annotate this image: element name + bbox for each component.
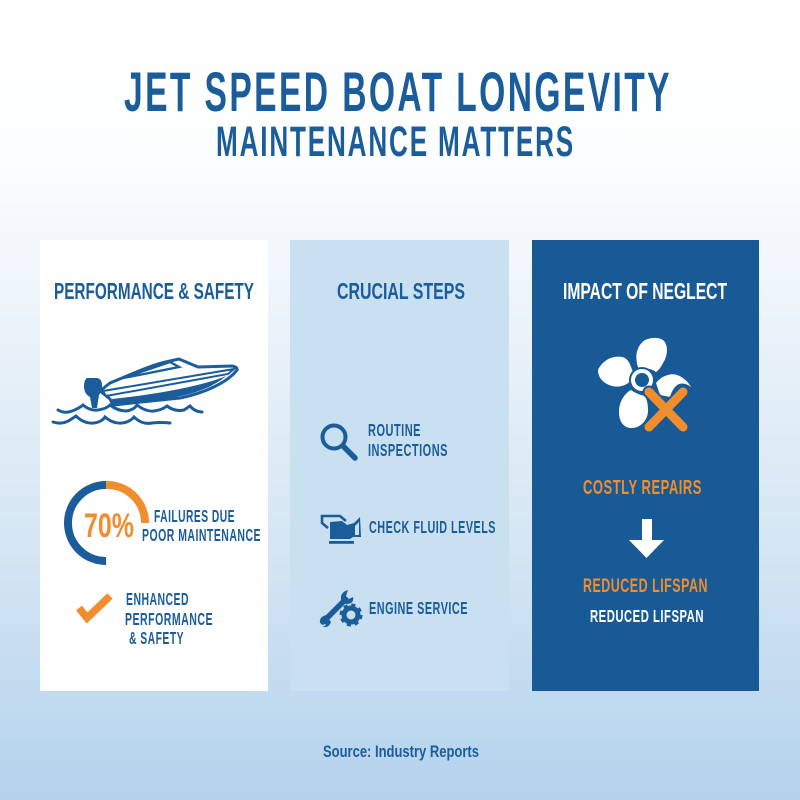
- icon: orange x: [649, 392, 683, 427]
- source note: Source: Industry Reports: [323, 742, 479, 761]
- text: failures due to poor maintenance: [142, 506, 261, 545]
- icon: check mark: [79, 596, 110, 618]
- panel: performance and safety: [40, 240, 268, 691]
- text: reduced lifespan white: REDUCED LIFSPAN: [590, 606, 704, 626]
- text: enhanced performance and safety: ENHANCED: [126, 589, 189, 609]
- text: routine inspections: ROUTINE: [368, 420, 421, 440]
- text: check fluid levels: CHECK FLUID LEVELS: [369, 517, 496, 537]
- heading: performance and safety: PERFORMANCE & SAFETY: [54, 278, 254, 304]
- icon: magnifying glass: [322, 426, 355, 458]
- panel: impact of neglect: [532, 240, 759, 691]
- text: enhanced performance and safety: [125, 589, 213, 648]
- text: enhanced performance and safety: PERFORMANCE: [125, 609, 213, 629]
- text: costly repairs: COSTLY REPAIRS: [583, 477, 702, 499]
- heading: impact of neglect: IMPACT OF NEGLECT: [563, 278, 727, 304]
- subtitle: MAINTENANCE MATTERS: [216, 118, 575, 166]
- text: reduced lifespan orange: REDUCED LIFSPAN: [583, 576, 708, 597]
- icon: oil can: [322, 516, 361, 544]
- arrow: down: [629, 519, 664, 558]
- icon: speed boat: [53, 359, 237, 423]
- heading: crucial steps: CRUCIAL STEPS: [337, 278, 465, 304]
- text: failures due to poor maintenance: FAILURES DUE: [154, 506, 235, 526]
- text: routine inspections: INSPECTIONS: [368, 440, 448, 460]
- text: engine service: ENGINE SERVICE: [369, 598, 468, 618]
- text: enhanced performance and safety: & SAFETY: [129, 628, 184, 648]
- icon: wrench and gear: [320, 590, 361, 627]
- icon: damaged propeller: [598, 338, 691, 428]
- text: routine inspections: [368, 420, 448, 460]
- stat: 70%: 70%: [84, 507, 134, 545]
- chart: 70 percent donut: [68, 485, 145, 561]
- text: failures due to poor maintenance: POOR MAINTENANCE: [142, 525, 261, 545]
- panel: crucial steps: [290, 240, 509, 691]
